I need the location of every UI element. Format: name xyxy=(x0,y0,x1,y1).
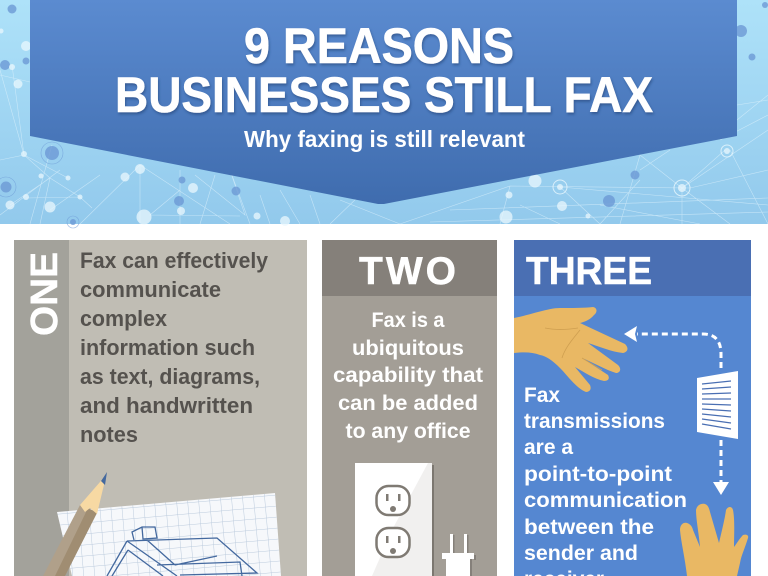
header bar: three xyxy=(514,240,751,296)
header bar: two xyxy=(322,240,497,296)
icon: receiving hand xyxy=(680,504,748,576)
text: reason one: information such xyxy=(80,335,255,360)
label: THREE: THREE xyxy=(526,250,652,293)
text: reason one: communicate xyxy=(80,277,221,302)
icon: sending hand xyxy=(514,307,627,392)
text: reason three: sender and xyxy=(524,542,638,565)
text: reason one xyxy=(80,248,269,447)
dashed arrow: to receiver xyxy=(713,440,729,495)
text: reason three: are a xyxy=(524,436,573,459)
text: reason three xyxy=(524,384,687,576)
text: reason two xyxy=(333,309,483,443)
text: reason three: communication xyxy=(524,489,687,512)
panel: one xyxy=(14,240,307,576)
text: reason three: transmissions xyxy=(524,410,665,433)
illustration: blueprint sheet xyxy=(57,493,281,576)
label: TWO: TWO xyxy=(359,250,456,293)
panel: three xyxy=(514,240,751,576)
text: reason two: to any office xyxy=(346,420,470,443)
house sketch xyxy=(107,527,257,576)
title text xyxy=(115,18,653,123)
icon: fax paper xyxy=(697,371,738,439)
text: reason two: ubiquitous xyxy=(352,337,464,360)
text: reason one: notes xyxy=(80,422,138,447)
label: ONE: ONE xyxy=(24,252,66,336)
title text: BUSINESSES STILL FAX xyxy=(115,67,653,123)
text: reason two: capability that xyxy=(333,364,483,387)
subtitle: Why faxing is still relevant xyxy=(244,126,525,152)
text: reason two: can be added xyxy=(338,392,478,415)
icon: plug xyxy=(442,534,476,576)
icon: wall outlet xyxy=(355,463,434,576)
text: reason one: complex xyxy=(80,306,168,331)
text: reason one: Fax can effectively xyxy=(80,248,269,273)
panel: two xyxy=(322,240,497,576)
title text: 9 REASONS xyxy=(244,18,514,74)
text: reason one: as text, diagrams, xyxy=(80,364,260,389)
text: reason one: and handwritten xyxy=(80,393,253,418)
title banner xyxy=(30,0,737,204)
text: reason two: Fax is a xyxy=(372,309,445,332)
text: reason three: Fax xyxy=(524,384,560,407)
dashed arrow: to sender xyxy=(624,326,721,368)
text: reason three: point-to-point xyxy=(524,463,672,486)
header network background xyxy=(0,0,768,228)
illustration: pencil xyxy=(43,472,107,576)
number strip: one xyxy=(14,240,69,576)
text: reason three: between the xyxy=(524,516,654,539)
